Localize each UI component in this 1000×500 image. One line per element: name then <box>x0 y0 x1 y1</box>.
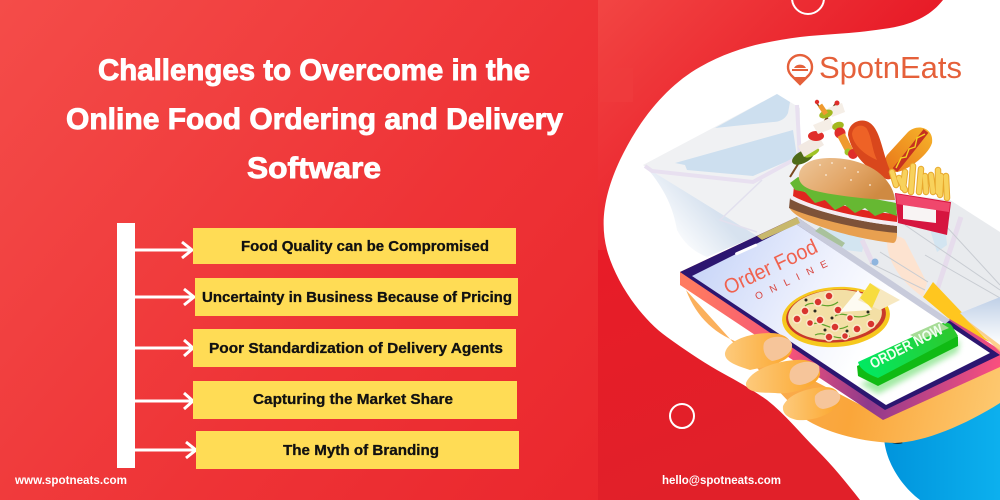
finger 2 <box>746 360 820 393</box>
decorative circle bottom <box>670 404 694 428</box>
item 3 <box>193 329 516 367</box>
phone frame seen through map <box>796 217 950 324</box>
item 2: Uncertainty in Business Because of Pricing <box>202 289 512 306</box>
arrow 5 <box>135 442 196 458</box>
finger 3 <box>783 387 840 420</box>
bottom bun <box>789 207 897 243</box>
lavender roads <box>862 217 961 290</box>
french fries <box>892 166 947 198</box>
finger 1 <box>725 333 792 370</box>
skewers <box>790 100 858 177</box>
screen <box>692 224 990 405</box>
illustration: food <box>789 100 951 243</box>
burger <box>789 158 897 243</box>
order now button <box>857 321 960 394</box>
order now button: ORDER NOW <box>867 321 947 373</box>
patty <box>789 198 897 233</box>
item 3: Poor Standardization of Delivery Agents <box>209 340 503 357</box>
illustration: smartphone <box>680 217 1000 420</box>
hot dog <box>885 128 932 172</box>
chicken drumstick <box>848 120 893 179</box>
palm <box>686 290 1000 443</box>
map pin <box>872 258 878 266</box>
cuff shadow <box>886 437 903 444</box>
screen heading: Order Food <box>720 235 821 300</box>
road lines <box>870 225 1000 298</box>
logo: SpotnEats <box>788 50 962 85</box>
arrow 4 <box>135 393 193 409</box>
yellow hand edge <box>923 282 990 342</box>
illustration: hand and sleeve <box>686 290 1000 500</box>
title: Challenges to Overcome in the <box>98 54 530 87</box>
icon: location pin with cloche <box>788 55 812 85</box>
white curved panel <box>604 0 1000 500</box>
sesame seeds <box>819 162 871 186</box>
item 5: The Myth of Branding <box>283 442 439 459</box>
item 5 <box>196 431 519 469</box>
lettuce <box>790 177 897 216</box>
sky gradient <box>960 297 1000 350</box>
speaker notch <box>735 243 758 256</box>
title: Online Food Ordering and Delivery <box>66 103 563 136</box>
pizza <box>780 283 900 351</box>
website link: www.spotneats.com <box>14 473 127 487</box>
title <box>66 54 563 185</box>
sleeve <box>884 402 1000 500</box>
decorative circle top <box>792 0 824 14</box>
white band <box>790 196 897 226</box>
arrow 2 <box>135 289 194 305</box>
item 4: Capturing the Market Share <box>253 391 453 408</box>
blue water patches <box>815 225 865 252</box>
vertical white bar <box>117 223 135 468</box>
screen subheading: ONLINE <box>754 259 830 303</box>
map overlay across phone <box>757 190 1000 352</box>
illustration: map background <box>643 94 800 257</box>
item 1: Food Quality can be Compromised <box>241 238 489 255</box>
fries box <box>895 193 951 235</box>
phone frame <box>680 217 1000 410</box>
logo wordmark: SpotnEats <box>819 50 962 85</box>
item 2 <box>195 278 518 316</box>
thumb through map <box>887 237 927 297</box>
email link: hello@spotneats.com <box>662 473 781 487</box>
arrow 1 <box>135 242 192 258</box>
top bun <box>799 158 895 200</box>
item 1 <box>193 228 516 264</box>
phone edge <box>680 217 1000 420</box>
illustration: fingers <box>725 333 840 420</box>
tomato <box>793 186 897 222</box>
item 4 <box>193 381 517 419</box>
arrow 3 <box>135 340 193 356</box>
title: Software <box>247 152 381 185</box>
